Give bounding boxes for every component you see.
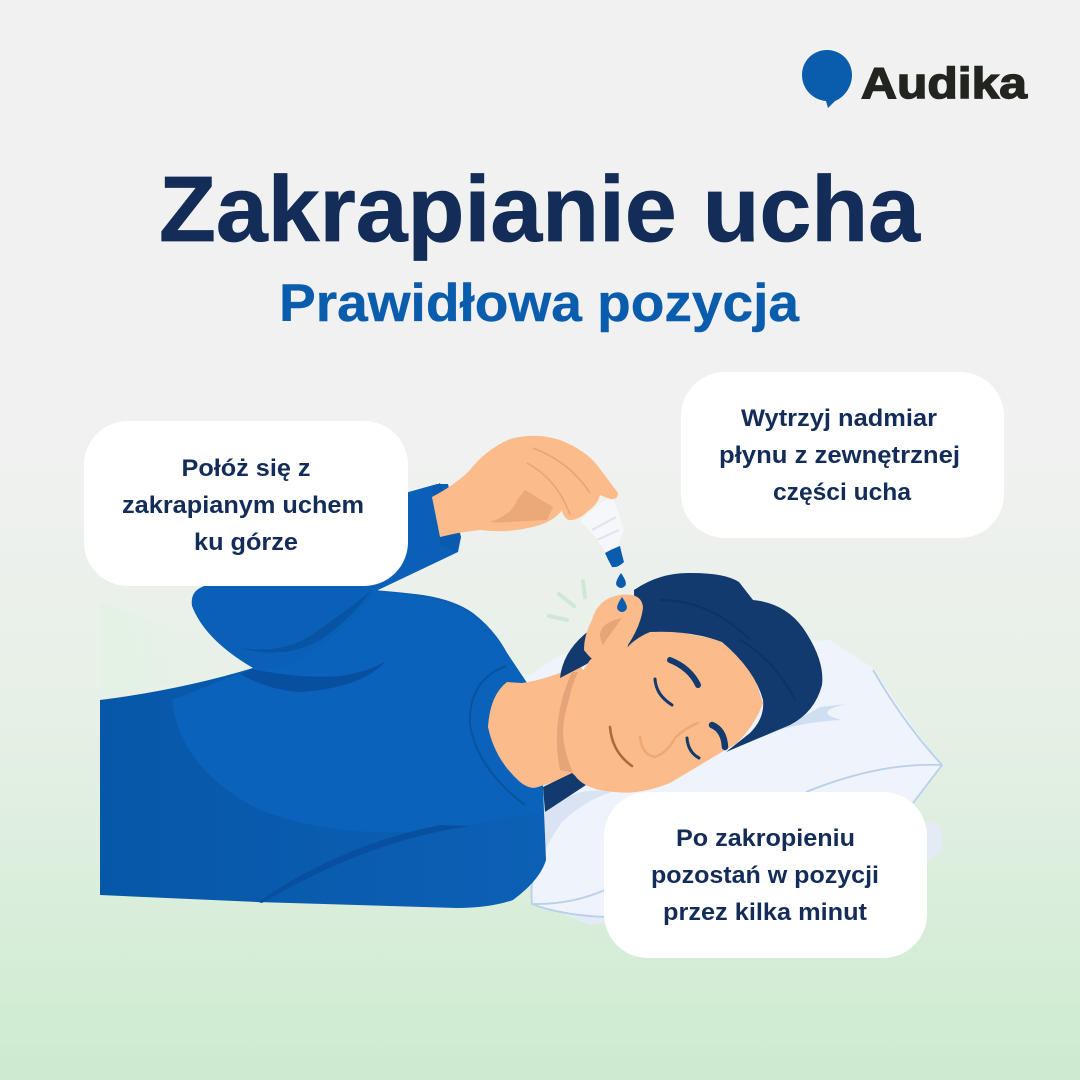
ear: [584, 595, 643, 669]
right brow: [712, 725, 725, 747]
dropper bottle: [580, 494, 624, 567]
callout: stay in position: pozostań w pozycji: [651, 862, 879, 889]
callout: lie down: [84, 421, 408, 586]
callout: stay in position: przez kilka minut: [663, 899, 867, 926]
pillow shadow: [540, 815, 943, 925]
illustration: person lying down with ear drops: [100, 436, 943, 925]
hair strands: [660, 600, 795, 700]
thumb crease: [490, 490, 553, 522]
cuff: [432, 483, 461, 552]
arm shadow: [240, 661, 386, 692]
closed eye lower: [687, 738, 699, 758]
hand shape: [432, 436, 618, 537]
callout: wipe excess: części ucha: [773, 479, 911, 506]
finger lines: [527, 448, 590, 515]
logo: Audika: [802, 50, 1028, 108]
bottle neck line: [592, 517, 619, 540]
callout box: [681, 372, 1004, 538]
logo wordmark: Audika: [861, 59, 1028, 108]
pillow body: [522, 640, 942, 917]
hair under chin: [543, 773, 586, 812]
closed eye upper: [655, 679, 672, 705]
callout text: Wytrzyj nadmiar: [741, 405, 937, 432]
back hair: [560, 630, 610, 678]
torso: [100, 590, 546, 908]
callout text: Połóż się z: [182, 455, 310, 482]
pillow crease: [735, 704, 847, 745]
title: Zakrapianie ucha: [159, 157, 921, 261]
shirt fold: [258, 825, 470, 903]
face: [563, 625, 763, 793]
collar line: [470, 666, 525, 805]
callout: wipe excess: płynu z zewnętrznej: [719, 442, 960, 469]
drop on ear: [617, 597, 627, 612]
falling drop: [616, 573, 626, 588]
bottle tip: [605, 546, 624, 567]
callout: lie down: ku górze: [194, 529, 298, 556]
icon: speech bubble: [802, 50, 852, 108]
bottle body: [580, 494, 624, 552]
pillow shading near head: [538, 791, 612, 872]
pillow outline: [532, 670, 942, 917]
callout text: Po zakropieniu: [676, 825, 855, 852]
upper arm and sleeve: [192, 484, 461, 669]
neck shading: [557, 672, 578, 773]
inner ear: [600, 618, 622, 645]
callout: lie down: zakrapianym uchem: [122, 492, 364, 519]
sleeve fold: [240, 590, 372, 652]
hair: [625, 573, 822, 752]
left brow: [670, 660, 698, 685]
mouth: [610, 727, 632, 766]
subtitle: Prawidłowa pozycja: [279, 274, 800, 333]
pale glow behind arm: [100, 602, 230, 696]
pillow: [522, 640, 943, 925]
nose: [640, 723, 698, 757]
neck: [488, 665, 600, 788]
callout box: [84, 421, 408, 586]
callout box: [604, 792, 927, 958]
chest highlight: [172, 592, 543, 832]
callout: wipe excess: [681, 372, 1004, 538]
hand: [432, 436, 618, 537]
head: [563, 573, 822, 793]
green motion ticks: [549, 581, 585, 620]
callout: stay in position: [604, 792, 927, 958]
